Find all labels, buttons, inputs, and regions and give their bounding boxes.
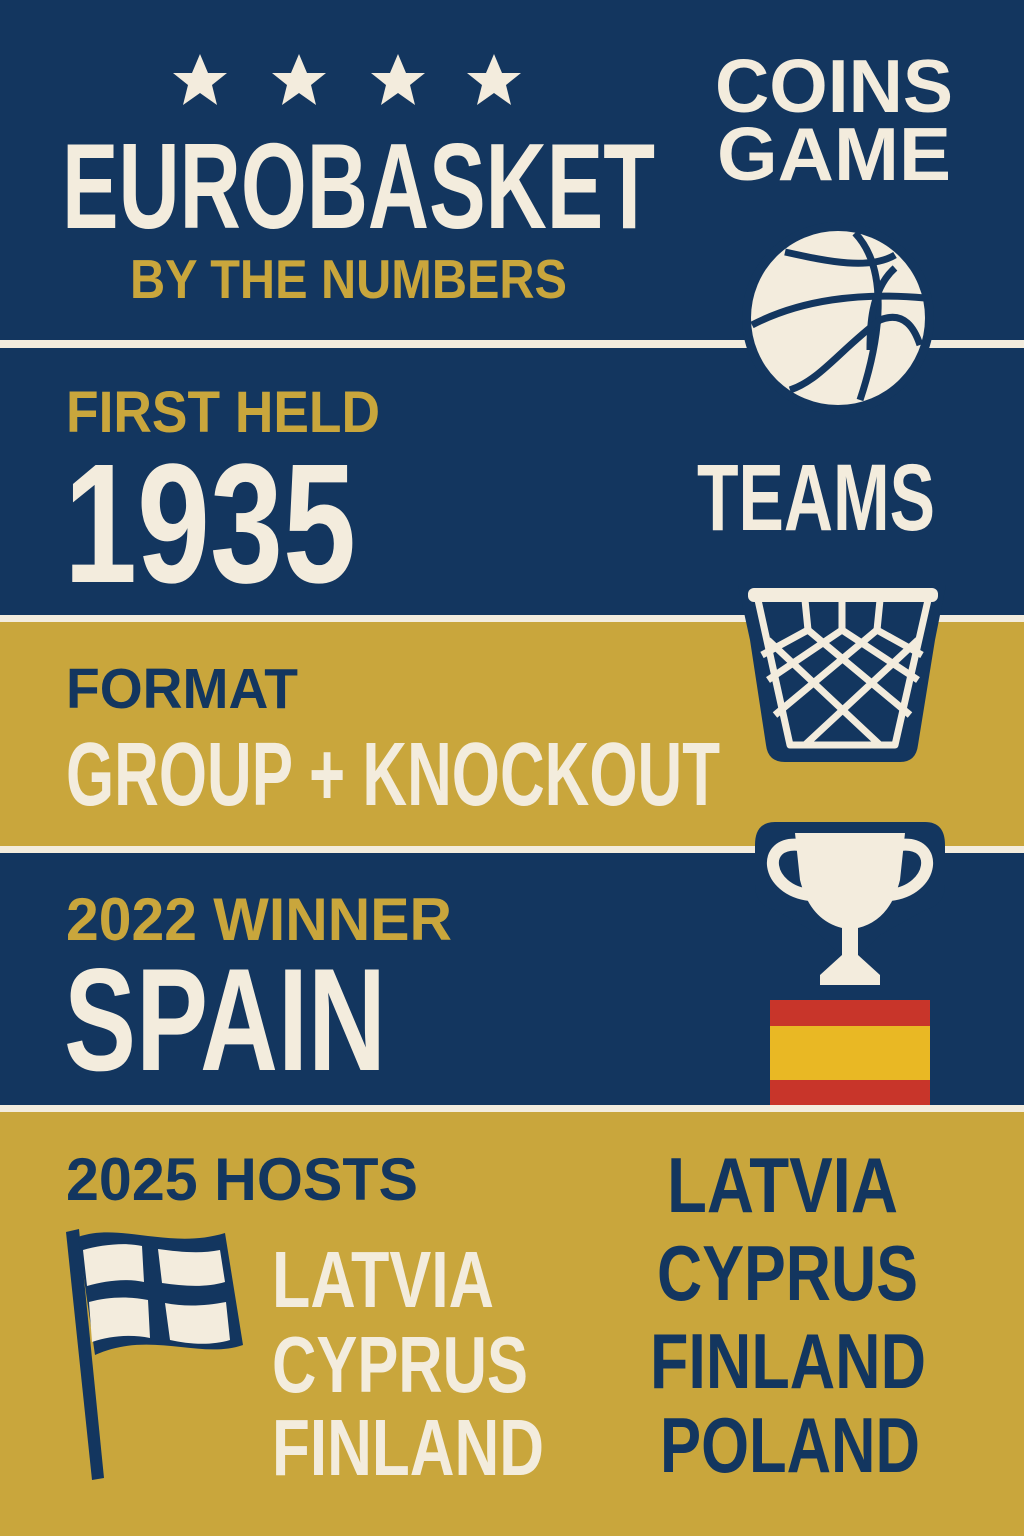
label: 2025 hosts: 2025 HOSTS [66,1146,418,1213]
label: teams: TEAMS [697,445,935,551]
list: hosts right: POLAND [660,1401,920,1489]
logo: coins game [715,44,953,196]
icon: basketball hoop [738,585,946,762]
list: hosts right [650,1141,926,1489]
logo: coins game: GAME [717,112,951,196]
list: hosts right: LATVIA [667,1141,898,1229]
icon: finland flag [66,1229,243,1480]
list: hosts right: CYPRUS [657,1229,918,1317]
list: hosts left: LATVIA [272,1235,494,1324]
list: hosts right: FINLAND [650,1317,926,1405]
list: hosts left [272,1235,544,1492]
value: group + knockout: GROUP + KNOCKOUT [66,725,720,825]
label: first held: FIRST HELD [66,380,380,445]
subtitle: BY THE NUMBERS [130,248,567,310]
value: spain: SPAIN [64,938,386,1101]
value: 1935: 1935 [64,429,356,619]
stars [173,54,521,105]
label: format: FORMAT [66,657,298,721]
title: EUROBASKET [62,118,655,254]
icon: spain flag [770,1000,930,1105]
icon: basketball [742,222,934,414]
label: 2022 winner: 2022 WINNER [66,886,452,953]
icon: trophy [755,822,945,985]
logo: coins game: COINS [715,44,953,128]
list: hosts left: CYPRUS [272,1320,528,1409]
list: hosts left: FINLAND [272,1403,544,1492]
